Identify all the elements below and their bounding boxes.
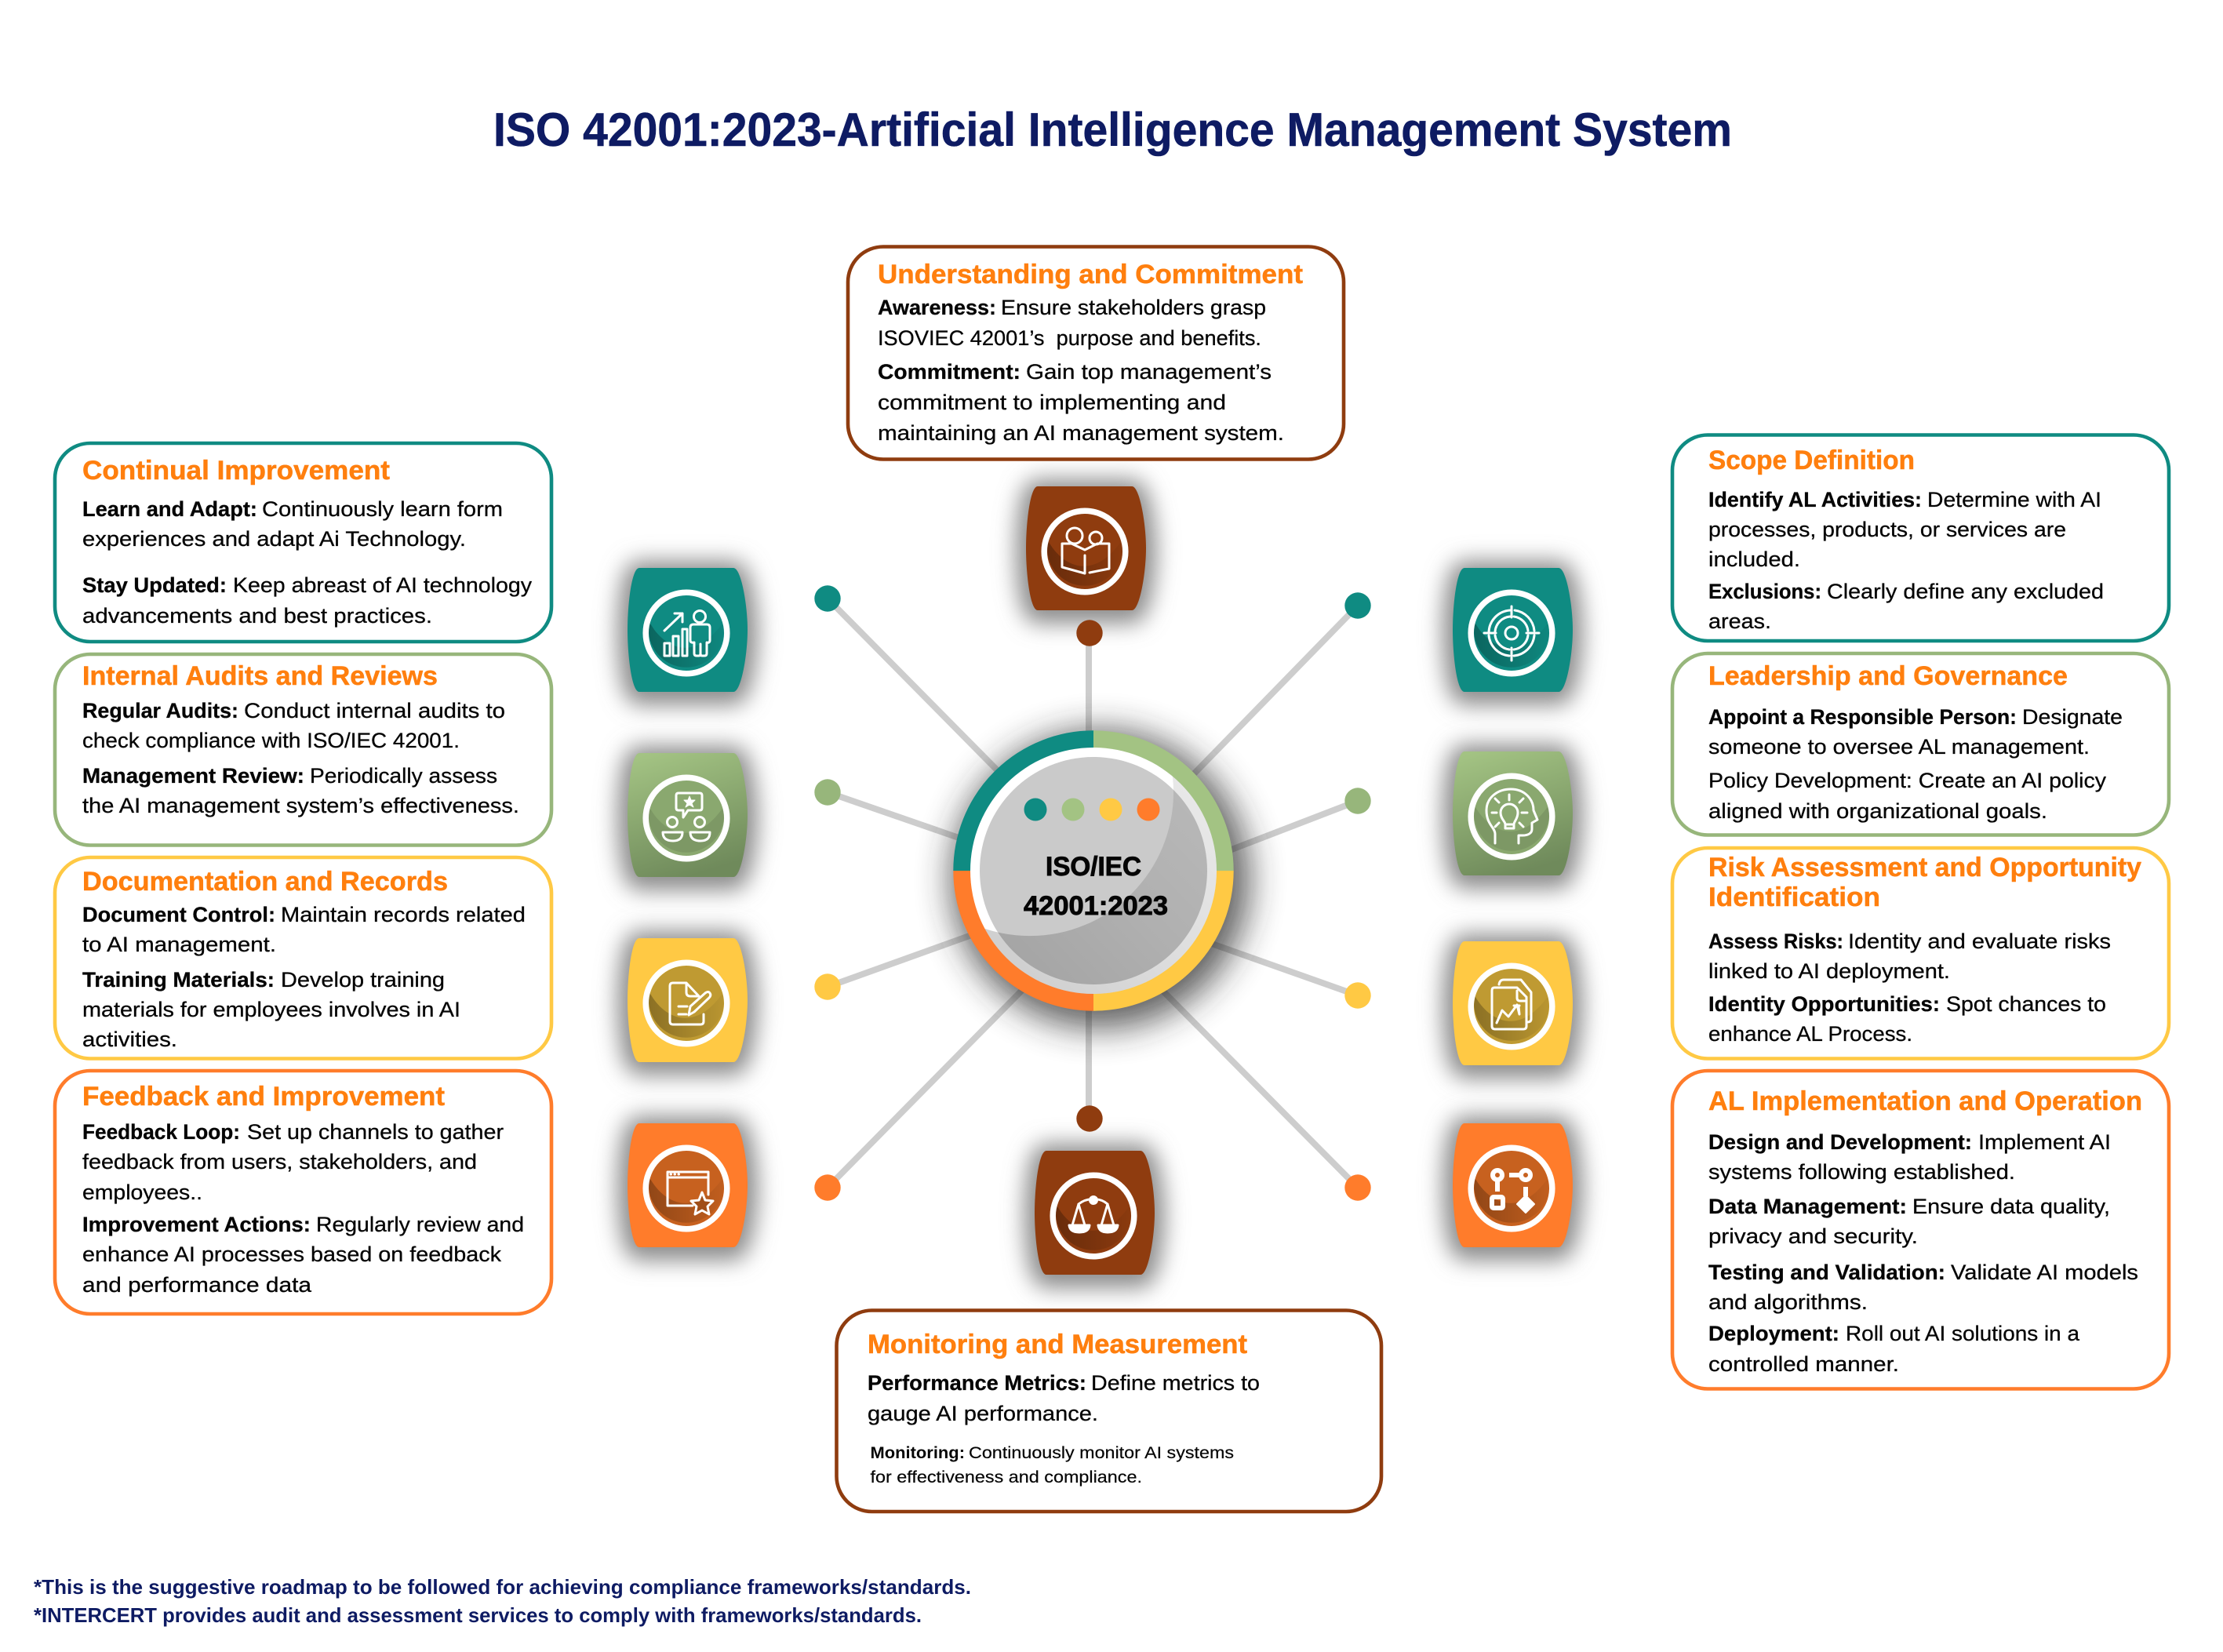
body text bbox=[82, 497, 533, 628]
body text: check compliance with ISO/IEC 42001. bbox=[82, 729, 460, 752]
body text bbox=[1708, 705, 2123, 823]
body text: Spot chances to bbox=[1946, 992, 2106, 1016]
body text: Regular Audits: bbox=[82, 699, 238, 722]
body text: Management Review: bbox=[82, 764, 304, 788]
body text: systems following established. bbox=[1708, 1160, 2015, 1184]
body text bbox=[82, 903, 526, 1051]
panel: internal audits and reviews bbox=[55, 654, 551, 846]
connector dots bbox=[814, 585, 1371, 1201]
body text: Define metrics to bbox=[1091, 1371, 1260, 1395]
panel: scope definition bbox=[1672, 435, 2169, 641]
body text: Identity Opportunities: bbox=[1708, 992, 1940, 1016]
body text: Roll out AI solutions in a bbox=[1846, 1322, 2080, 1345]
body text: Ensure data quality, bbox=[1912, 1195, 2110, 1218]
panel: risk assessment and opportunity identification bbox=[1672, 848, 2169, 1059]
heading bbox=[1708, 853, 2141, 912]
body text: Gain top management’s bbox=[1026, 360, 1272, 384]
body text: employees.. bbox=[82, 1181, 202, 1204]
icon: implementation bbox=[1453, 1123, 1573, 1250]
body text: Learn and Adapt: bbox=[82, 497, 257, 521]
body text: Continuously monitor AI systems bbox=[969, 1444, 1234, 1462]
body text: Periodically assess bbox=[310, 764, 497, 788]
body text: Implement AI bbox=[1978, 1130, 2111, 1154]
heading: Leadership and Governance bbox=[1708, 661, 2068, 691]
body text bbox=[1708, 488, 2104, 633]
body text: Monitoring: bbox=[871, 1444, 965, 1462]
body text: Assess Risks: bbox=[1708, 930, 1843, 953]
panel: continual improvement bbox=[55, 443, 551, 642]
title: ISO 42001:2023-Artificial Intelligence Management System bbox=[493, 104, 1732, 156]
body text: Testing and Validation: bbox=[1708, 1261, 1945, 1284]
footnotes: *This is the suggestive roadmap to be followed for achieving compliance frameworks/standards. bbox=[34, 1575, 971, 1599]
icon: feedback bbox=[628, 1123, 748, 1250]
body text: Designate bbox=[2022, 705, 2123, 729]
body text: Deployment: bbox=[1708, 1322, 1839, 1345]
heading: Scope Definition bbox=[1708, 446, 1915, 475]
panel: documentation and records bbox=[55, 857, 551, 1059]
body text: Validate AI models bbox=[1951, 1261, 2138, 1284]
body text bbox=[1708, 1130, 2138, 1376]
heading: Understanding and Commitment bbox=[878, 260, 1303, 289]
body text bbox=[1708, 930, 2111, 1046]
body text bbox=[82, 1120, 524, 1297]
body text: processes, products, or services are bbox=[1708, 518, 2066, 541]
body text: Regularly review and bbox=[316, 1213, 524, 1236]
body text: activities. bbox=[82, 1028, 177, 1051]
body text: Ensure stakeholders grasp bbox=[1001, 296, 1266, 319]
body text: enhance AL Process. bbox=[1708, 1022, 1912, 1046]
body text: Improvement Actions: bbox=[82, 1213, 311, 1236]
body text: enhance AI processes based on feedback bbox=[82, 1243, 502, 1266]
body text: and algorithms. bbox=[1708, 1290, 1868, 1314]
body text: controlled manner. bbox=[1708, 1352, 1899, 1376]
panel: AL implementation and operation bbox=[1672, 1071, 2169, 1388]
body text bbox=[878, 296, 1284, 445]
body text: experiences and adapt Ai Technology. bbox=[82, 527, 466, 551]
body text: the AI management system’s effectiveness. bbox=[82, 794, 519, 817]
heading: Risk Assessment and Opportunity bbox=[1708, 853, 2141, 882]
body text: Keep abreast of AI technology bbox=[233, 573, 533, 597]
footnotes: *INTERCERT provides audit and assessment services to comply with frameworks/standards. bbox=[34, 1603, 922, 1627]
heading: Continual Improvement bbox=[82, 456, 390, 486]
heading: Internal Audits and Reviews bbox=[82, 661, 438, 691]
body text: Data Management: bbox=[1708, 1195, 1907, 1218]
body text: Appoint a Responsible Person: bbox=[1708, 705, 2017, 729]
body text: Continuously learn form bbox=[262, 497, 503, 521]
body text: ISOVIEC 42001’s purpose and benefits. bbox=[878, 326, 1261, 350]
heading: Identification bbox=[1708, 882, 1880, 912]
body text: Performance Metrics: bbox=[868, 1371, 1086, 1395]
icon: documentation bbox=[628, 938, 748, 1065]
body text: advancements and best practices. bbox=[82, 604, 432, 628]
footnotes bbox=[34, 1575, 971, 1627]
icon: continual improvement bbox=[628, 568, 748, 695]
icon: monitoring bbox=[1035, 1151, 1155, 1278]
icon: understanding bbox=[1026, 486, 1146, 613]
body text: Maintain records related bbox=[281, 903, 526, 926]
body text: linked to AI deployment. bbox=[1708, 959, 1950, 983]
body text: privacy and security. bbox=[1708, 1224, 1918, 1248]
body text: areas. bbox=[1708, 609, 1771, 633]
body text: Commitment: bbox=[878, 360, 1021, 384]
panel: feedback and improvement bbox=[55, 1071, 551, 1314]
icon: risk assessment bbox=[1453, 941, 1573, 1068]
icon: scope bbox=[1453, 568, 1573, 695]
body text: Conduct internal audits to bbox=[244, 699, 505, 722]
body text: Feedback Loop: bbox=[82, 1120, 240, 1144]
body text bbox=[868, 1371, 1260, 1486]
body text: Set up channels to gather bbox=[247, 1120, 504, 1144]
body text: Stay Updated: bbox=[82, 573, 227, 597]
body text: maintaining an AI management system. bbox=[878, 421, 1284, 445]
body text: Awareness: bbox=[878, 296, 996, 319]
body text: for effectiveness and compliance. bbox=[871, 1468, 1142, 1486]
central hub: 42001:2023 bbox=[1024, 891, 1168, 921]
body text: someone to oversee AL management. bbox=[1708, 735, 2090, 759]
body text: included. bbox=[1708, 548, 1800, 571]
body text: Identify AL Activities: bbox=[1708, 488, 1922, 511]
body text: Determine with AI bbox=[1927, 488, 2101, 511]
body text: commitment to implementing and bbox=[878, 391, 1226, 414]
body text: Document Control: bbox=[82, 903, 275, 926]
body text bbox=[82, 699, 519, 817]
panel: understanding and commitment bbox=[848, 246, 1344, 460]
body text: Clearly define any excluded bbox=[1827, 580, 2104, 603]
body text: and performance data bbox=[82, 1273, 312, 1297]
body text: materials for employees involves in AI bbox=[82, 998, 460, 1021]
connector lines bbox=[828, 599, 1358, 1188]
body text: Policy Development: Create an AI policy bbox=[1708, 769, 2107, 792]
body text: gauge AI performance. bbox=[868, 1402, 1098, 1425]
central hub bbox=[924, 703, 1277, 1056]
body text: Develop training bbox=[281, 968, 445, 992]
body text: Exclusions: bbox=[1708, 580, 1821, 603]
body text: aligned with organizational goals. bbox=[1708, 799, 2047, 823]
heading: Monitoring and Measurement bbox=[868, 1330, 1247, 1359]
panel: leadership and governance bbox=[1672, 653, 2169, 835]
heading: Documentation and Records bbox=[82, 867, 448, 897]
heading: AL Implementation and Operation bbox=[1708, 1086, 2142, 1116]
body text: to AI management. bbox=[82, 933, 276, 956]
body text: feedback from users, stakeholders, and bbox=[82, 1150, 477, 1174]
body text: Identity and evaluate risks bbox=[1848, 930, 2111, 953]
body text: Training Materials: bbox=[82, 968, 275, 992]
panel: monitoring and measurement bbox=[836, 1310, 1381, 1512]
central hub: ISO/IEC bbox=[1046, 852, 1141, 882]
heading: Feedback and Improvement bbox=[82, 1082, 445, 1112]
icon: leadership bbox=[1453, 751, 1573, 879]
icon: internal audits bbox=[628, 753, 748, 880]
body text: Design and Development: bbox=[1708, 1130, 1972, 1154]
